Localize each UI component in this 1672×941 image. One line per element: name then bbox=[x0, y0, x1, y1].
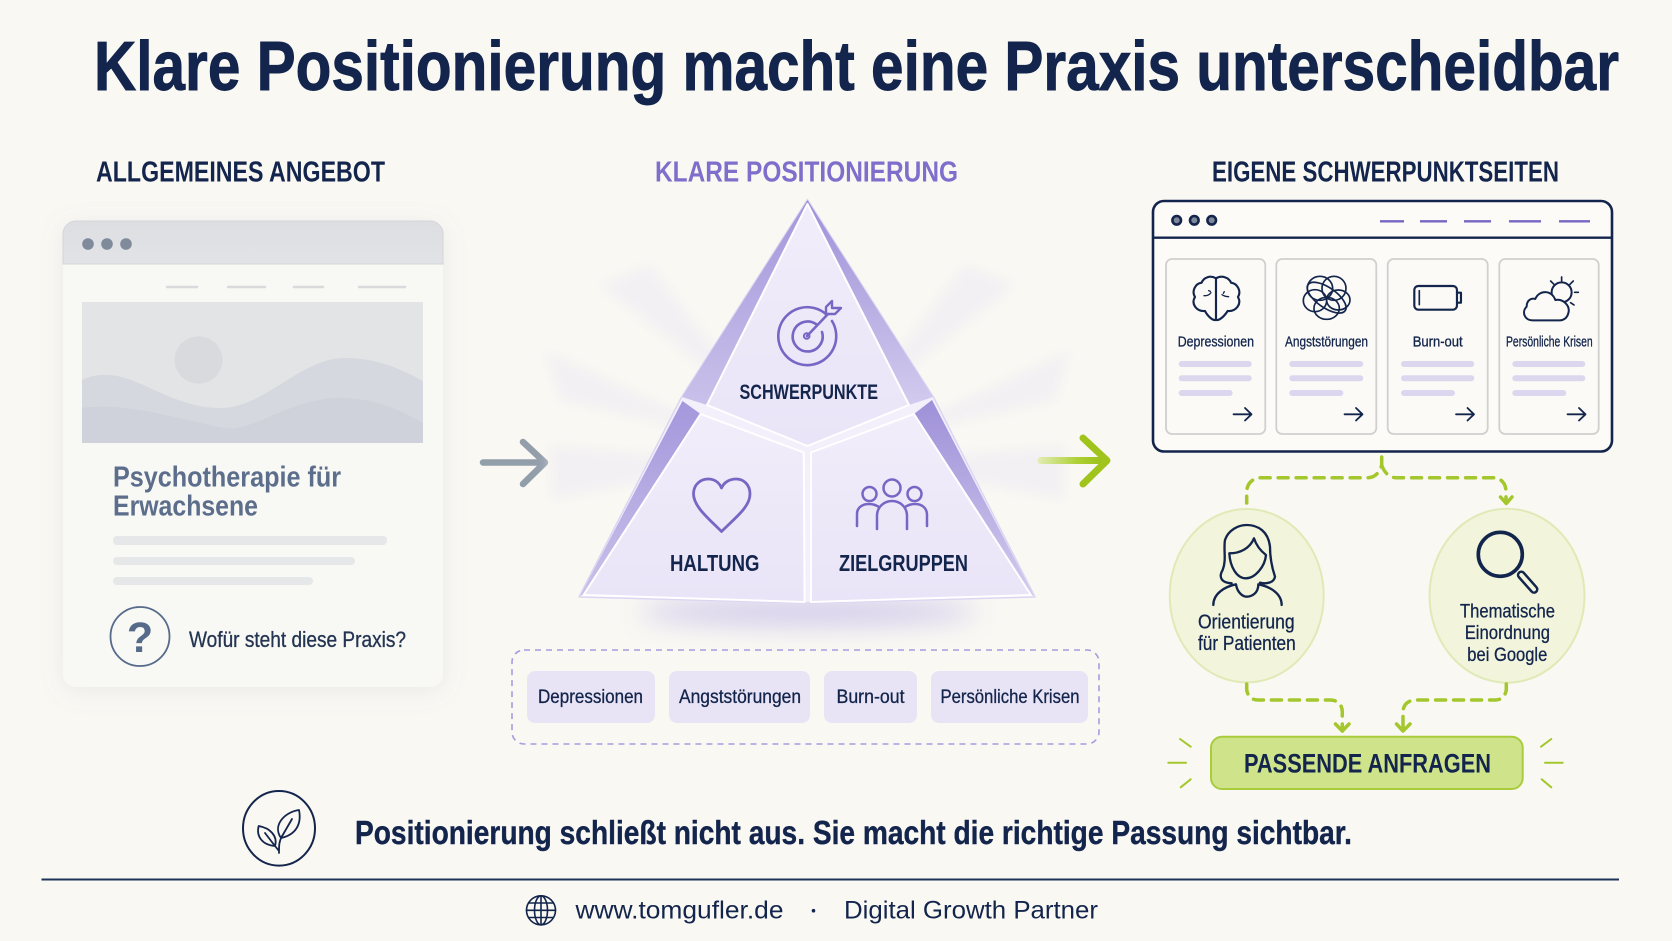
page heading text: Psychotherapie für bbox=[113, 462, 341, 494]
icon: question mark bbox=[110, 607, 170, 666]
segment: Haltung bbox=[584, 414, 805, 602]
panel: positioning pyramid bbox=[545, 200, 1070, 626]
panel: orientation for patients bbox=[1170, 509, 1324, 682]
segment: Schwerpunkte bbox=[707, 204, 909, 446]
panel: orientation for patients: für Patienten bbox=[1198, 633, 1296, 655]
arrow: positioning to focus pages bbox=[1041, 438, 1107, 484]
background light rays bbox=[545, 265, 1070, 500]
question text: Wofür steht diese Praxis? bbox=[189, 627, 406, 652]
pyramid ground shadow bbox=[638, 598, 978, 626]
panel: focus topic chips bbox=[512, 650, 1099, 744]
card: Depressionen: Depressionen bbox=[1178, 335, 1254, 351]
placeholder hero image bbox=[82, 302, 423, 443]
panel: focus pages browser window bbox=[1153, 201, 1612, 452]
callout: matching enquiries: PASSENDE ANFRAGEN bbox=[1244, 749, 1491, 779]
window dots bbox=[1172, 216, 1216, 225]
icon: question mark: ? bbox=[127, 614, 153, 662]
segment: Schwerpunkte: SCHWERPUNKTE bbox=[740, 380, 878, 404]
panel: orientation for patients: Orientierung bbox=[1198, 611, 1295, 633]
icon: cloud with sun bbox=[1524, 277, 1578, 320]
page heading text: Erwachsene bbox=[113, 490, 258, 522]
chip: Angststörungen: Angststörungen bbox=[679, 687, 801, 708]
chip: Depressionen bbox=[527, 671, 655, 723]
chip: Depressionen: Depressionen bbox=[538, 687, 643, 708]
footer: www.tomgufler.de bbox=[574, 896, 784, 924]
card: Angststörungen: Angststörungen bbox=[1285, 335, 1368, 351]
icon: brain bbox=[1194, 277, 1239, 320]
arrow: dashed split to both outcomes bbox=[1247, 457, 1512, 504]
card: Angststörungen bbox=[1276, 259, 1376, 434]
heading: Allgemeines Angebot: ALLGEMEINES ANGEBOT bbox=[96, 156, 385, 188]
panel: thematic classification on Google: bei Google bbox=[1467, 644, 1547, 666]
footer bbox=[526, 896, 1098, 925]
heading: Eigene Schwerpunktseiten: EIGENE SCHWERPUNKTSEITEN bbox=[1212, 156, 1559, 188]
icon: plant in circle bbox=[243, 791, 315, 866]
icon: target with arrow bbox=[778, 301, 841, 365]
browser header bar bbox=[63, 221, 443, 264]
card: Burn-out: Burn-out bbox=[1413, 335, 1463, 351]
panel: generic website browser window bbox=[63, 221, 443, 687]
callout: matching enquiries bbox=[1168, 737, 1563, 789]
panel: thematic classification on Google bbox=[1430, 509, 1584, 683]
navigation lines bbox=[167, 286, 405, 288]
icon: tangled knot bbox=[1302, 276, 1351, 319]
page heading text bbox=[113, 462, 341, 522]
card: Depressionen bbox=[1166, 259, 1265, 434]
chip: Angststörungen bbox=[669, 671, 810, 723]
panel: thematic classification on Google: Einordnung bbox=[1465, 622, 1550, 644]
chip: Burn-out bbox=[824, 671, 917, 723]
footer: Digital Growth Partner bbox=[844, 896, 1098, 924]
heading: Klare Positionierung: KLARE POSITIONIERUNG bbox=[655, 156, 958, 188]
navigation lines bbox=[1380, 220, 1590, 223]
icon: woman bbox=[1213, 525, 1282, 605]
panel: thematic classification on Google: Thematische bbox=[1460, 600, 1555, 622]
pyramid side facets bbox=[580, 200, 1034, 596]
arrow: generic to positioning bbox=[483, 442, 545, 484]
icon: globe bbox=[526, 896, 556, 925]
burst lines bbox=[1168, 739, 1563, 787]
icon: magnifying glass bbox=[1478, 532, 1534, 589]
icon: low battery bbox=[1414, 286, 1461, 310]
placeholder text lines bbox=[113, 536, 387, 585]
card: Persönliche Krisen: Persönliche Krisen bbox=[1506, 335, 1593, 351]
chip: Persönliche Krisen: Persönliche Krisen bbox=[940, 687, 1080, 708]
card: Persönliche Krisen bbox=[1499, 259, 1599, 434]
card: Burn-out bbox=[1388, 259, 1488, 434]
pyramid base bbox=[579, 200, 1035, 603]
chip: Burn-out: Burn-out bbox=[836, 687, 905, 708]
key message: Positionierung schließt nicht aus. Sie macht die richtige Passung sichtbar. bbox=[355, 814, 1352, 851]
icon: heart bbox=[693, 479, 750, 532]
window dots bbox=[82, 238, 132, 250]
icon: group of people bbox=[857, 480, 927, 529]
segment: Zielgruppen: ZIELGRUPPEN bbox=[839, 550, 968, 576]
arrow: dashed merge to matching enquiries bbox=[1247, 684, 1506, 731]
segment: Zielgruppen bbox=[811, 414, 1031, 602]
segment: Haltung: HALTUNG bbox=[670, 550, 760, 576]
chip: Persönliche Krisen bbox=[931, 671, 1088, 723]
